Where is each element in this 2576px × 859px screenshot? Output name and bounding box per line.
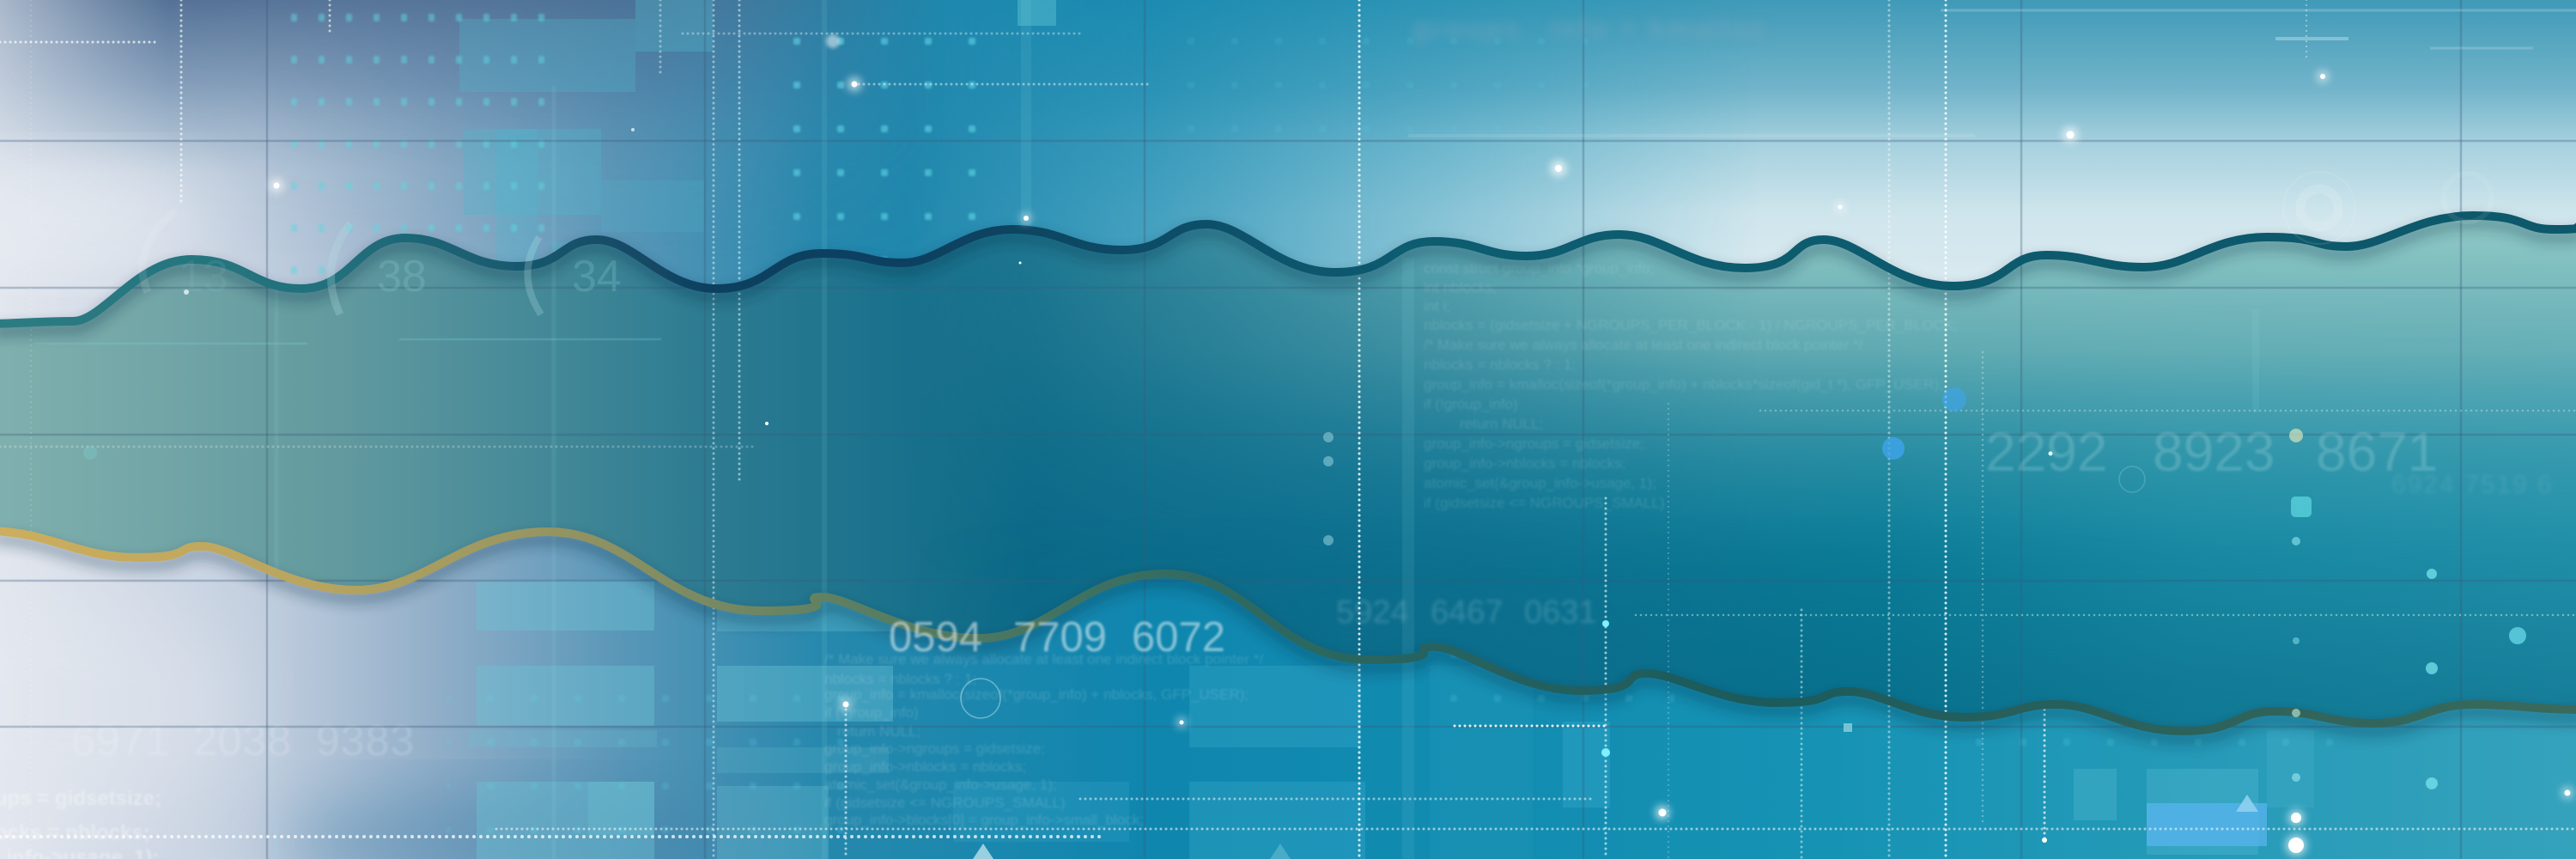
code block centre right: group_info->nblocks = nblocks; [1424,455,1625,472]
number string 6971 2038 9383: 2038 [193,716,292,765]
number string 6971 2038 9383: 6971 [71,716,170,765]
code block centre right: group_info->ngroups = gidsetsize; [1424,436,1644,452]
number string 5924 6467 0631: 6467 [1431,594,1504,631]
code block lower centre: if (!group_info) [824,704,919,721]
faint light beams [276,0,2256,859]
number string 2292 8923 8671: 2292 [1985,421,2107,483]
code block lower centre: atomic_set(&group_info->usage, 1); [824,777,1057,793]
number string 2292 8923 8671: 8923 [2153,421,2275,483]
translucent data blocks upper left [459,0,1056,326]
bottom wave line with shadow [0,531,2576,731]
number string 5924 6467 0631: 5924 [1336,594,1409,631]
translucent data blocks lower left [468,550,893,859]
number string 0594 7709 6072 [889,614,1225,661]
gauge reading 38 [331,223,427,314]
gauge reading 13: 13 [179,252,228,302]
dot matrix upper [288,9,1614,318]
code block centre right: if (gidsetsize <= NGROUPS_SMALL) [1424,495,1665,511]
code block centre right: group_info = kmalloc(sizeof(*group_info) + nblocks*sizeof(gid_t *), GFP_USER); [1424,376,1943,393]
thin light streaks [34,10,2576,344]
code block lower centre [824,651,1263,828]
top wave line with shadow [0,216,2576,324]
number string far right: 6924 7519 6 [2391,471,2554,499]
code block centre right: if (!group_info) [1424,396,1518,412]
code block lower centre: /* Make sure we always allocate at least one indirect block pointer */ [824,651,1263,667]
number string 2292 8923 8671 [1985,421,2438,483]
code block centre right: int nblocks; [1424,279,1497,295]
number string 0594 7709 6072: 7709 [1013,614,1107,661]
code block centre right: return NULL; [1460,416,1543,432]
code block lower centre: group_info->nblocks = nblocks; [824,758,1026,775]
translucent data blocks lower centre [953,550,1610,859]
code block lower centre: group_info->ngroups = gidsetsize; [824,740,1045,757]
blue and teal data nodes [83,387,2526,789]
code block lower centre: if (gidsetsize <= NGROUPS_SMALL) [824,795,1066,811]
code block lower centre: return NULL; [837,723,920,740]
gauge reading 13 [143,210,228,302]
ring markers [961,172,2492,718]
number string 6971 2038 9383: 9383 [316,716,415,765]
gauge reading 34: 34 [572,252,622,302]
number string 0594 7709 6072: 0594 [889,614,982,661]
wave band [0,198,2576,747]
code block lower centre: nblocks = nblocks ? : 1; [824,671,976,687]
gauge reading 34 [527,237,622,314]
number string 0594 7709 6072: 6072 [1132,614,1225,661]
code block centre right: int i; [1424,298,1450,314]
code block lower centre: group_info->blocks[0] = group_info->small_block; [824,812,1144,828]
triangle markers [973,795,2258,859]
number string 5924 6467 0631 [1336,594,1597,631]
number string 2292 8923 8671: 8671 [2316,421,2438,483]
background code text lower left [0,787,161,859]
code block centre right: nblocks = (gidsetsize + NGROUPS_PER_BLOCK - 1) / NGROUPS_PER_BLOCK; [1424,317,1958,333]
blurred top code heading: groups_ info + kmalloc [1413,13,1769,44]
code block centre right: /* Make sure we always allocate at least one indirect block pointer */ [1424,337,1862,353]
gauge reading 38: 38 [377,252,427,302]
translucent data blocks lower right [2074,730,2314,855]
code block centre right: nblocks = nblocks ? : 1; [1424,356,1576,373]
code block centre right: const struct group_info *group_info; [1424,260,1654,277]
code block centre right [1424,260,1958,511]
code block lower centre: group_info = kmalloc(sizeof(*group_info) + nblocks, GFP_USER); [824,686,1249,703]
code block centre right: atomic_set(&group_info->usage, 1); [1424,475,1656,491]
number string 6971 2038 9383 [71,716,415,765]
number string 5924 6467 0631: 0631 [1524,594,1597,631]
dot matrix lower [447,593,2336,859]
